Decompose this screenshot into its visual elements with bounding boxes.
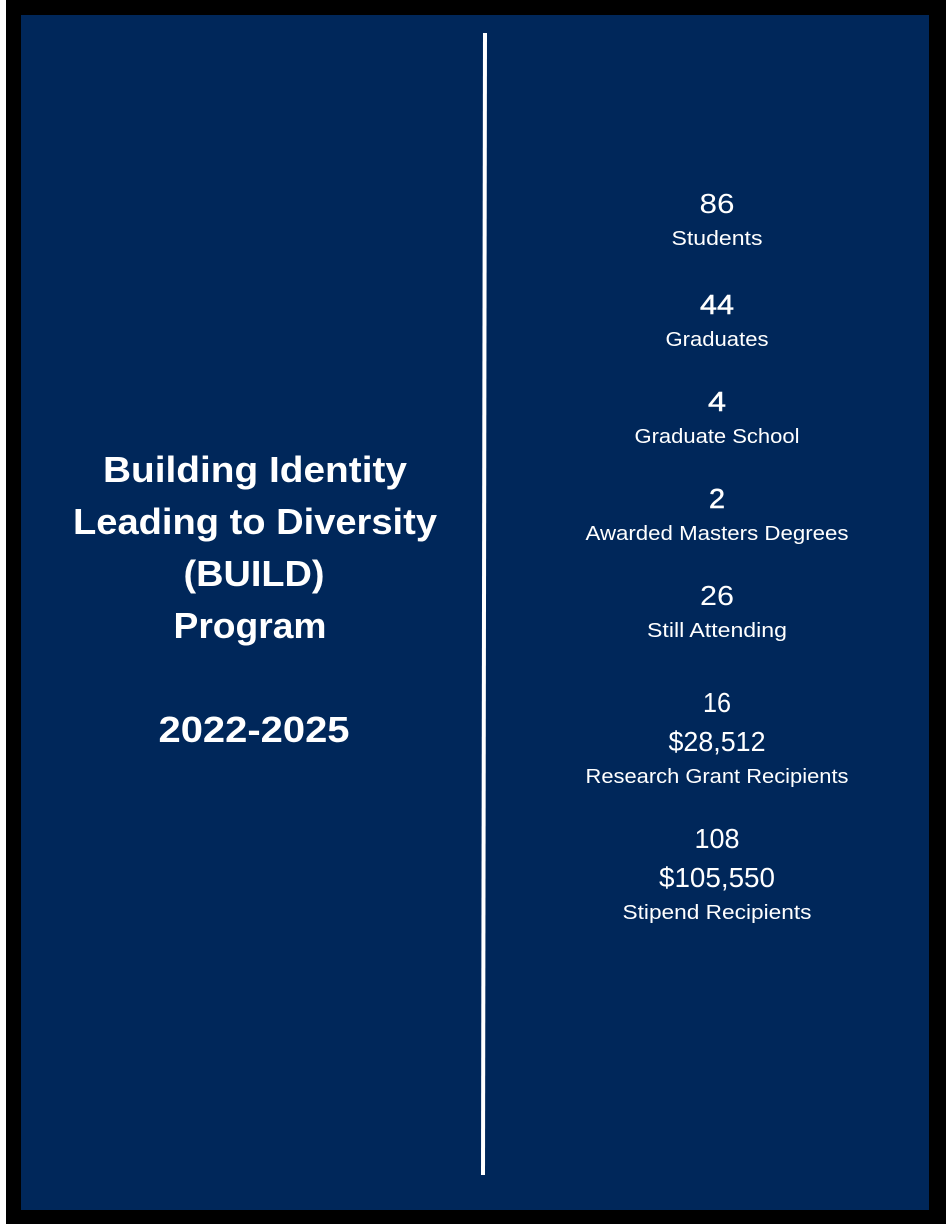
stat: stipends: $105,550 — [659, 862, 775, 893]
stat: research grants: $28,512 — [668, 726, 766, 757]
stat: still attending — [647, 580, 787, 642]
title: (BUILD) — [184, 553, 324, 594]
title: Program — [174, 605, 326, 646]
stat: stipends: 108 — [694, 823, 740, 854]
stat: graduate school — [634, 386, 800, 448]
vertical divider — [481, 33, 487, 1175]
title: 2022-2025 — [158, 709, 350, 750]
stat: research grants: 16 — [703, 687, 731, 718]
stat: masters degrees: 2 — [709, 483, 725, 514]
stat: students: 86 — [700, 188, 734, 219]
stat: students: Students — [672, 228, 762, 250]
stat: students — [672, 188, 762, 250]
stat: still attending: Still Attending — [647, 620, 787, 642]
stat: stipends: Stipend Recipients — [622, 902, 812, 924]
stat: graduates: 44 — [700, 289, 734, 320]
stat: graduates — [666, 289, 768, 351]
stat: research grants: Research Grant Recipients — [586, 766, 848, 788]
stat: still attending: 26 — [700, 580, 734, 611]
stat: masters degrees: Awarded Masters Degrees — [586, 523, 848, 545]
stat: graduates: Graduates — [666, 329, 768, 351]
title — [73, 449, 437, 750]
stat: graduate school: 4 — [708, 386, 726, 417]
stat: graduate school: Graduate School — [634, 426, 800, 448]
page edge strip — [0, 0, 6, 1224]
stat: research grants — [586, 687, 848, 788]
title: Building Identity — [103, 449, 407, 490]
title: Leading to Diversity — [73, 501, 437, 542]
stat: masters degrees — [586, 483, 848, 545]
stat: stipends — [622, 823, 812, 924]
